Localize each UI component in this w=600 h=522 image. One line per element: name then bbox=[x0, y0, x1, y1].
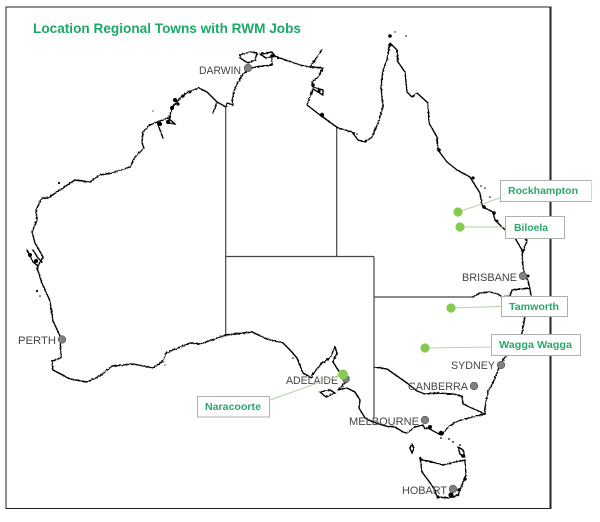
coastal detail marks bbox=[28, 31, 530, 499]
city: Sydney: SYDNEY bbox=[451, 360, 496, 372]
city: Darwin: DARWIN bbox=[199, 65, 241, 77]
city: Adelaide: ADELAIDE bbox=[286, 375, 338, 387]
title: Location Regional Towns with RWM Jobs bbox=[33, 20, 301, 36]
callout: Naracoorte: Naracoorte bbox=[205, 401, 261, 413]
state borders bbox=[226, 107, 473, 418]
Tasmania bbox=[420, 457, 466, 498]
Victoria and NSW border bbox=[374, 367, 485, 414]
callout: Wagga Wagga bbox=[420, 334, 580, 356]
callout: Biloela bbox=[455, 216, 564, 238]
islands bbox=[27, 52, 527, 457]
callout: Rockhampton bbox=[453, 180, 592, 217]
callout: Naracoorte bbox=[198, 370, 348, 417]
city: Canberra: CANBERRA bbox=[408, 381, 469, 393]
city: Melbourne: MELBOURNE bbox=[349, 416, 419, 428]
callout: Rockhampton: Rockhampton bbox=[508, 185, 578, 197]
callout: Tamworth bbox=[446, 296, 568, 316]
callout: Tamworth: Tamworth bbox=[509, 301, 559, 313]
city: Brisbane: BRISBANE bbox=[462, 272, 517, 284]
callout: Biloela: Biloela bbox=[514, 222, 548, 234]
Queensland and NSW border bbox=[473, 288, 530, 297]
Australia coastline bbox=[27, 43, 531, 498]
callout: Wagga Wagga: Wagga Wagga bbox=[499, 339, 572, 351]
city: Perth: PERTH bbox=[18, 335, 56, 347]
city: Hobart: HOBART bbox=[402, 485, 447, 497]
